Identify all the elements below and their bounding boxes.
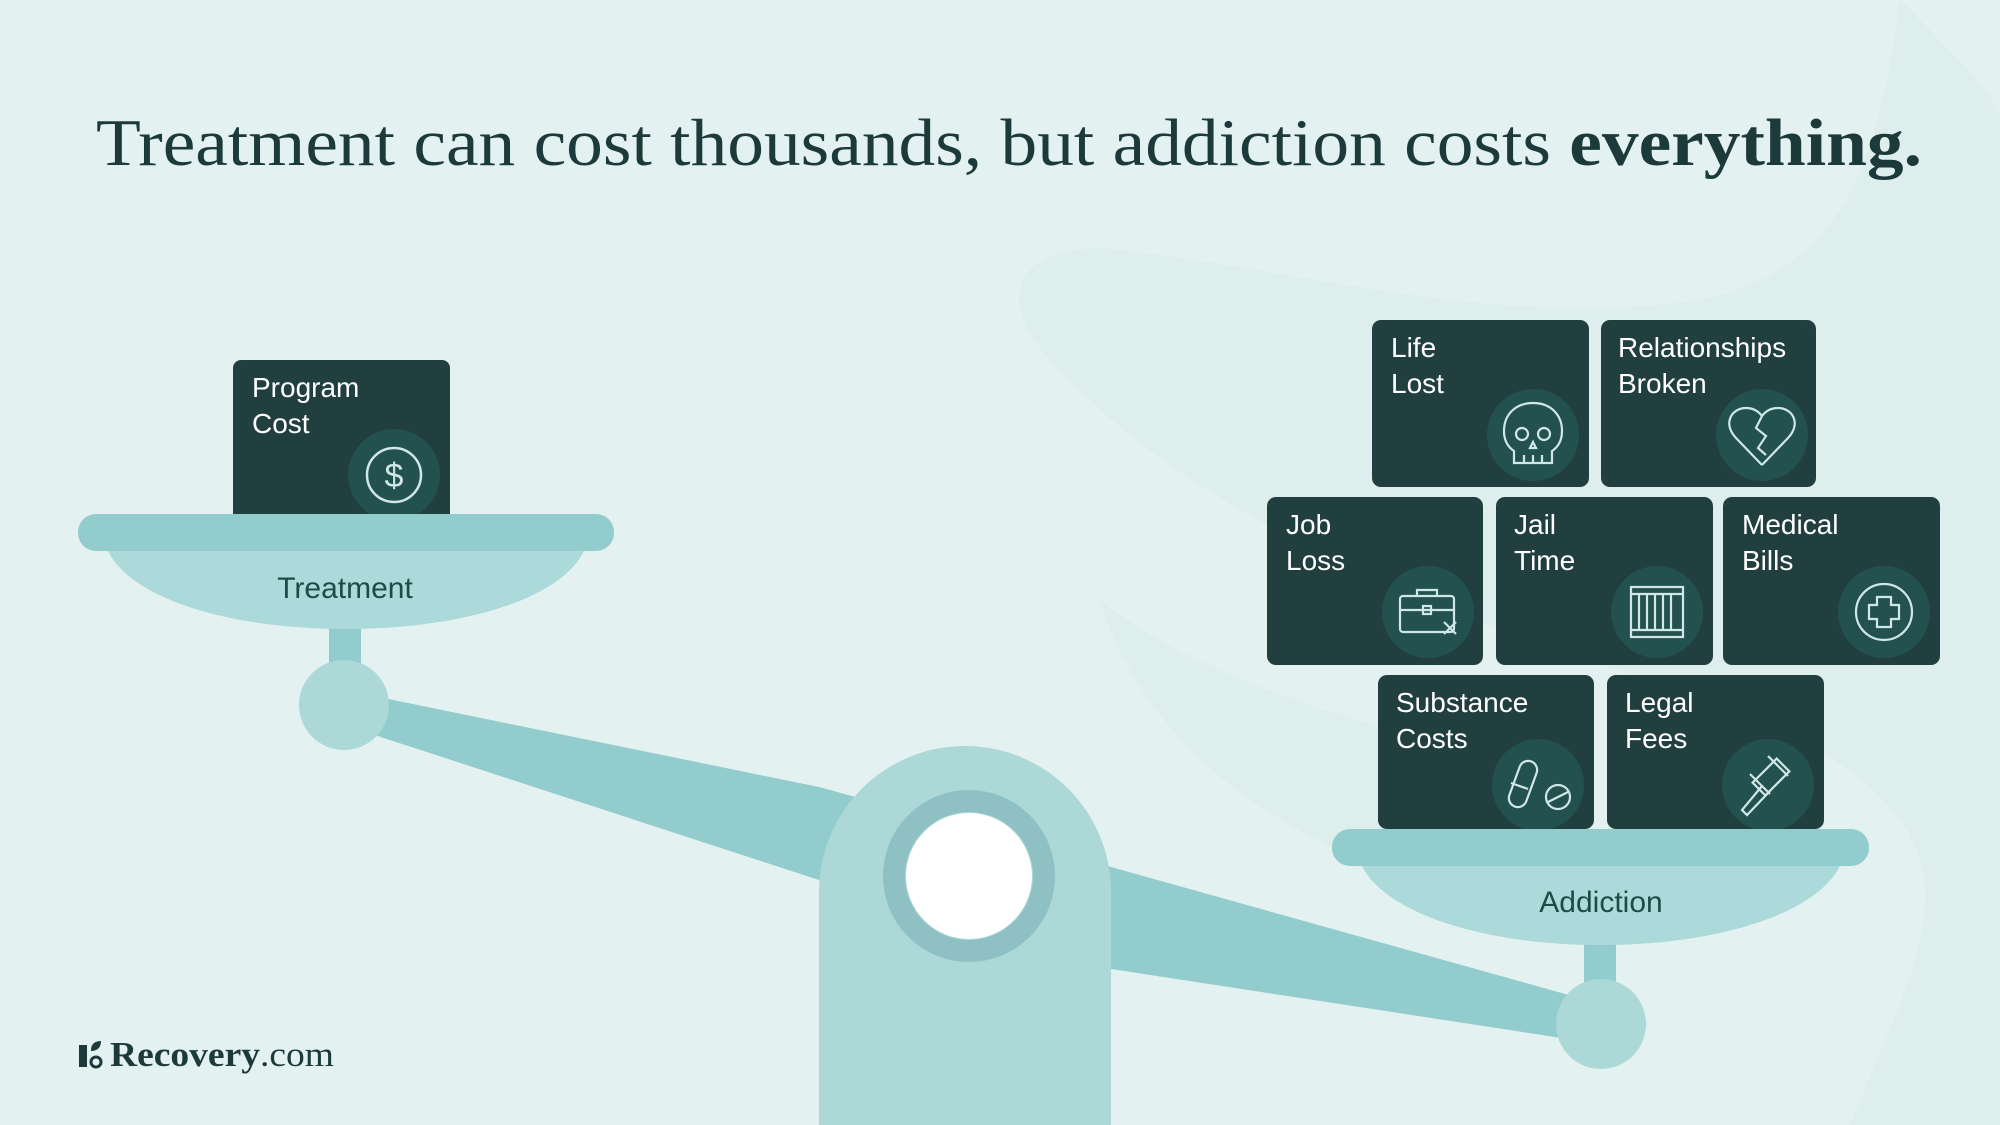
box: Program Cost (233, 360, 450, 521)
logo: Recovery .com (110, 1035, 334, 1074)
right pan: Addiction (1332, 829, 1869, 1069)
box: Program Cost: Cost (252, 408, 310, 439)
box: Program Cost: $ (385, 457, 404, 495)
title: Treatment can cost thousands, but addiction costs everything. (96, 106, 1922, 180)
box: Relationships Broken: Relationships (1618, 332, 1786, 363)
box: Legal Fees: Fees (1625, 723, 1687, 754)
box: Life Lost: Life (1391, 332, 1436, 363)
box: Relationships Broken: Broken (1618, 368, 1707, 399)
box: Life Lost: Lost (1391, 368, 1444, 399)
box: Jail Time: Jail (1514, 509, 1556, 540)
left pan: Treatment: Treatment (277, 572, 413, 605)
scale beam (344, 690, 1601, 1044)
box: Program Cost: Program (252, 372, 359, 403)
box: Substance Costs: Substance (1396, 687, 1528, 718)
right pan: Addiction: Addiction (1539, 886, 1663, 919)
left pan: Treatment (78, 514, 614, 750)
box: Jail Time (1496, 497, 1713, 665)
box: Job Loss: Job (1286, 509, 1331, 540)
box: Relationships Broken (1601, 320, 1816, 487)
box: Medical Bills: Bills (1742, 545, 1793, 576)
background swirls (1019, 0, 2000, 1125)
box: Medical Bills (1723, 497, 1940, 665)
box: Job Loss: Loss (1286, 545, 1345, 576)
box: Job Loss (1267, 497, 1483, 665)
box: Legal Fees (1607, 675, 1824, 831)
box: Medical Bills: Medical (1742, 509, 1838, 540)
scale pillar (819, 746, 1111, 1125)
box: Legal Fees: Legal (1625, 687, 1694, 718)
box: Substance Costs: Costs (1396, 723, 1468, 754)
box: Jail Time: Time (1514, 545, 1575, 576)
box: Substance Costs (1378, 675, 1594, 831)
box: Life Lost (1372, 320, 1589, 487)
